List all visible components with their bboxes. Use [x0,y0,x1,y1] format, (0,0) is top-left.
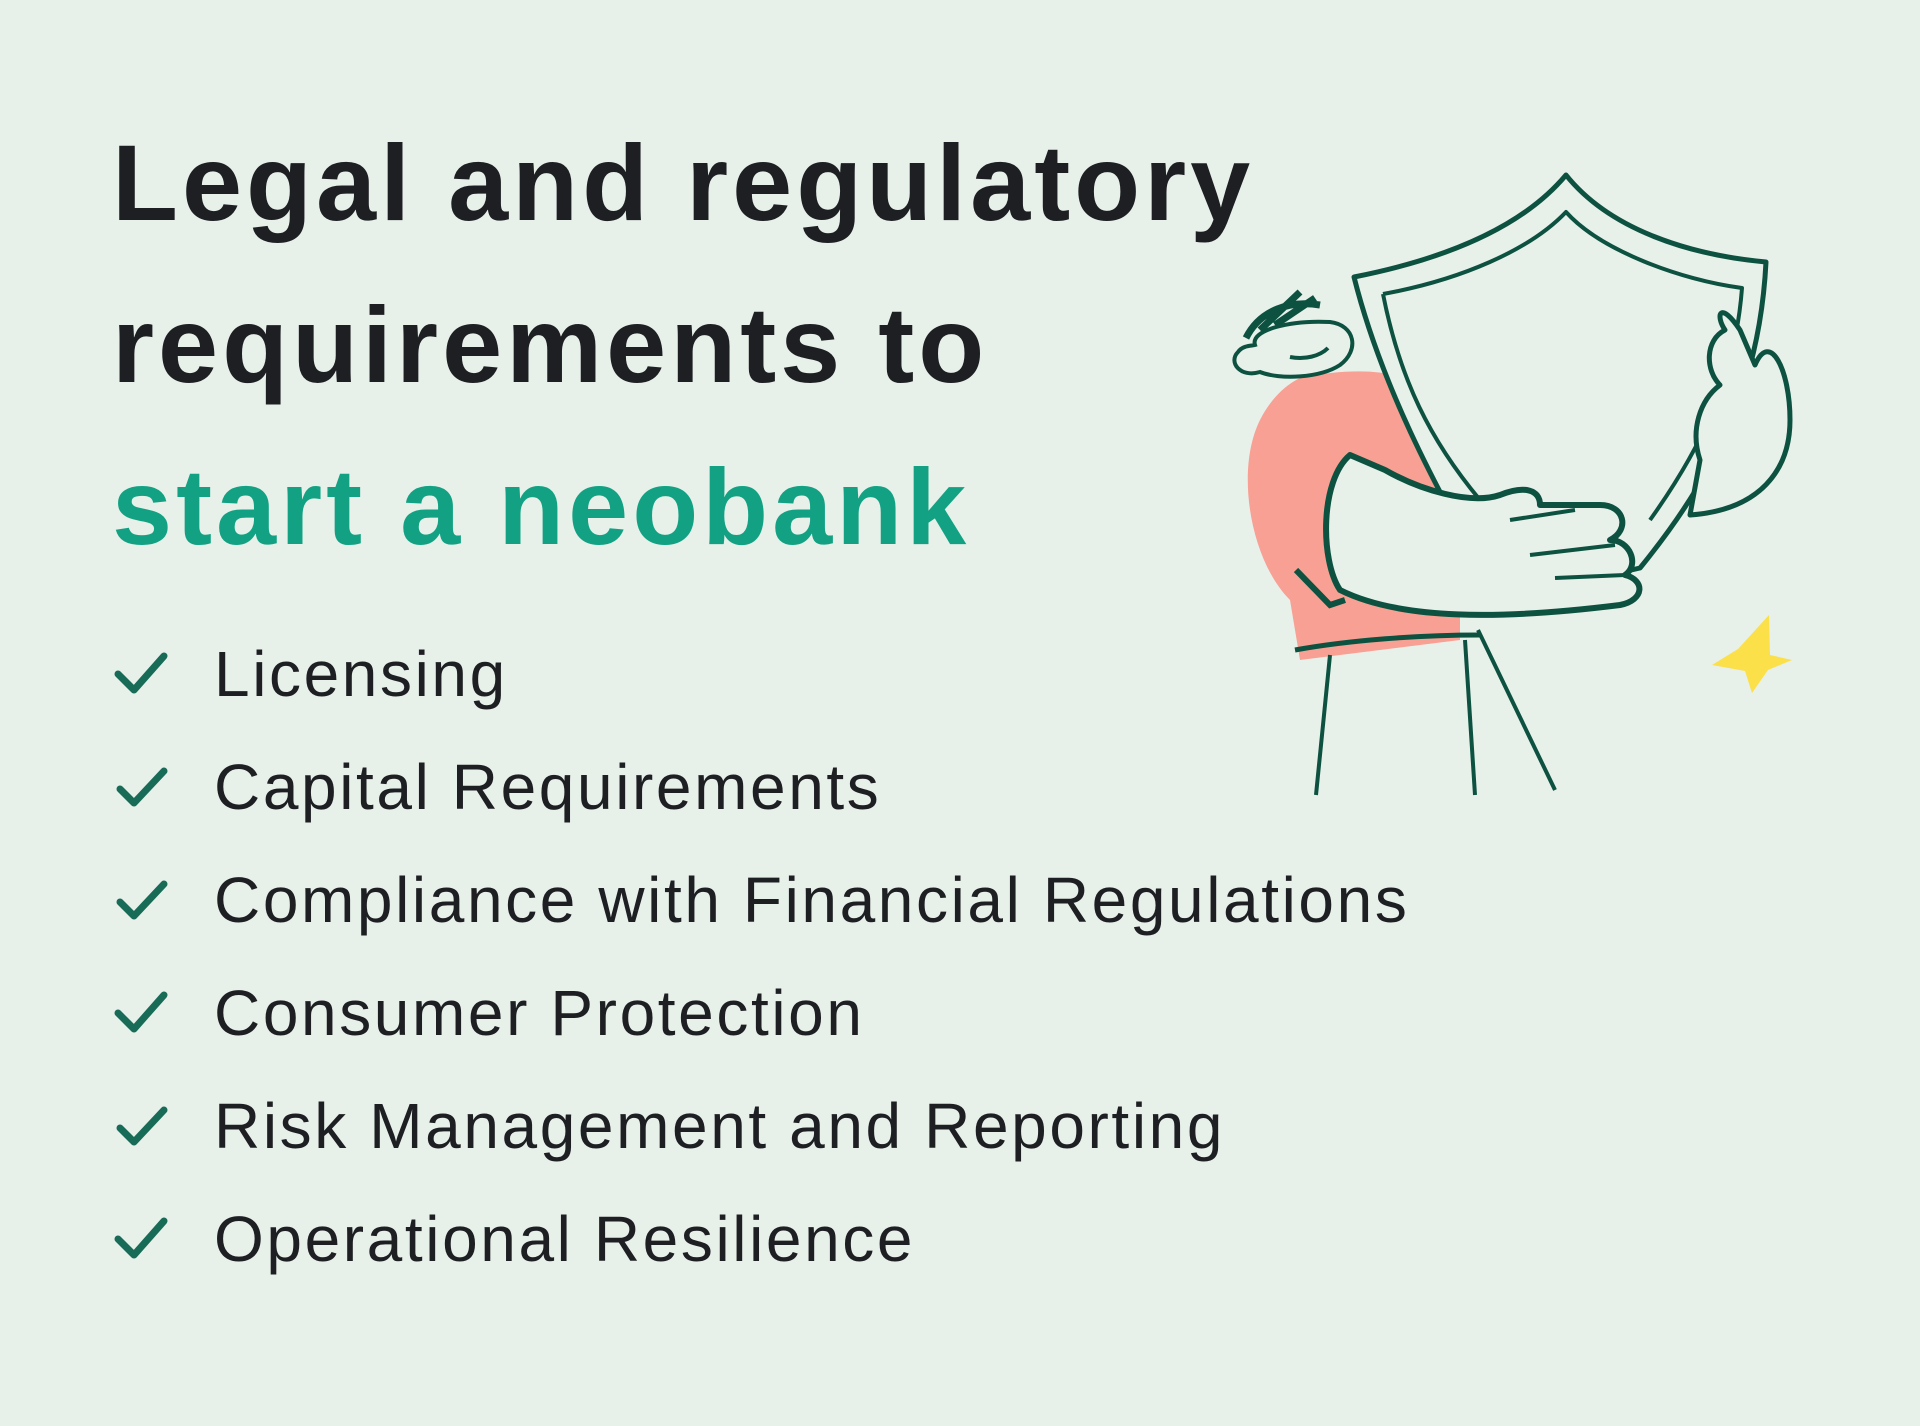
star [1712,615,1792,693]
checklist [114,638,1409,1275]
item: resilience: Operational Resilience [214,1203,915,1275]
head [1234,292,1352,377]
shield [1354,175,1766,600]
item: consumer: Consumer Protection [214,977,865,1049]
right hand [1690,313,1790,515]
illustration: person holding shield [1232,172,1792,796]
body [1248,371,1555,795]
item: licensing: Licensing [214,638,508,710]
arm [1326,455,1639,615]
title [112,122,1254,567]
item: risk: Risk Management and Reporting [214,1090,1225,1162]
title: Legal and regulatory [112,122,1254,243]
title: requirements to [112,284,988,405]
title: start a neobank [112,446,970,567]
item: compliance: Compliance with Financial Regulations [214,864,1409,936]
item: capital: Capital Requirements [214,751,881,823]
